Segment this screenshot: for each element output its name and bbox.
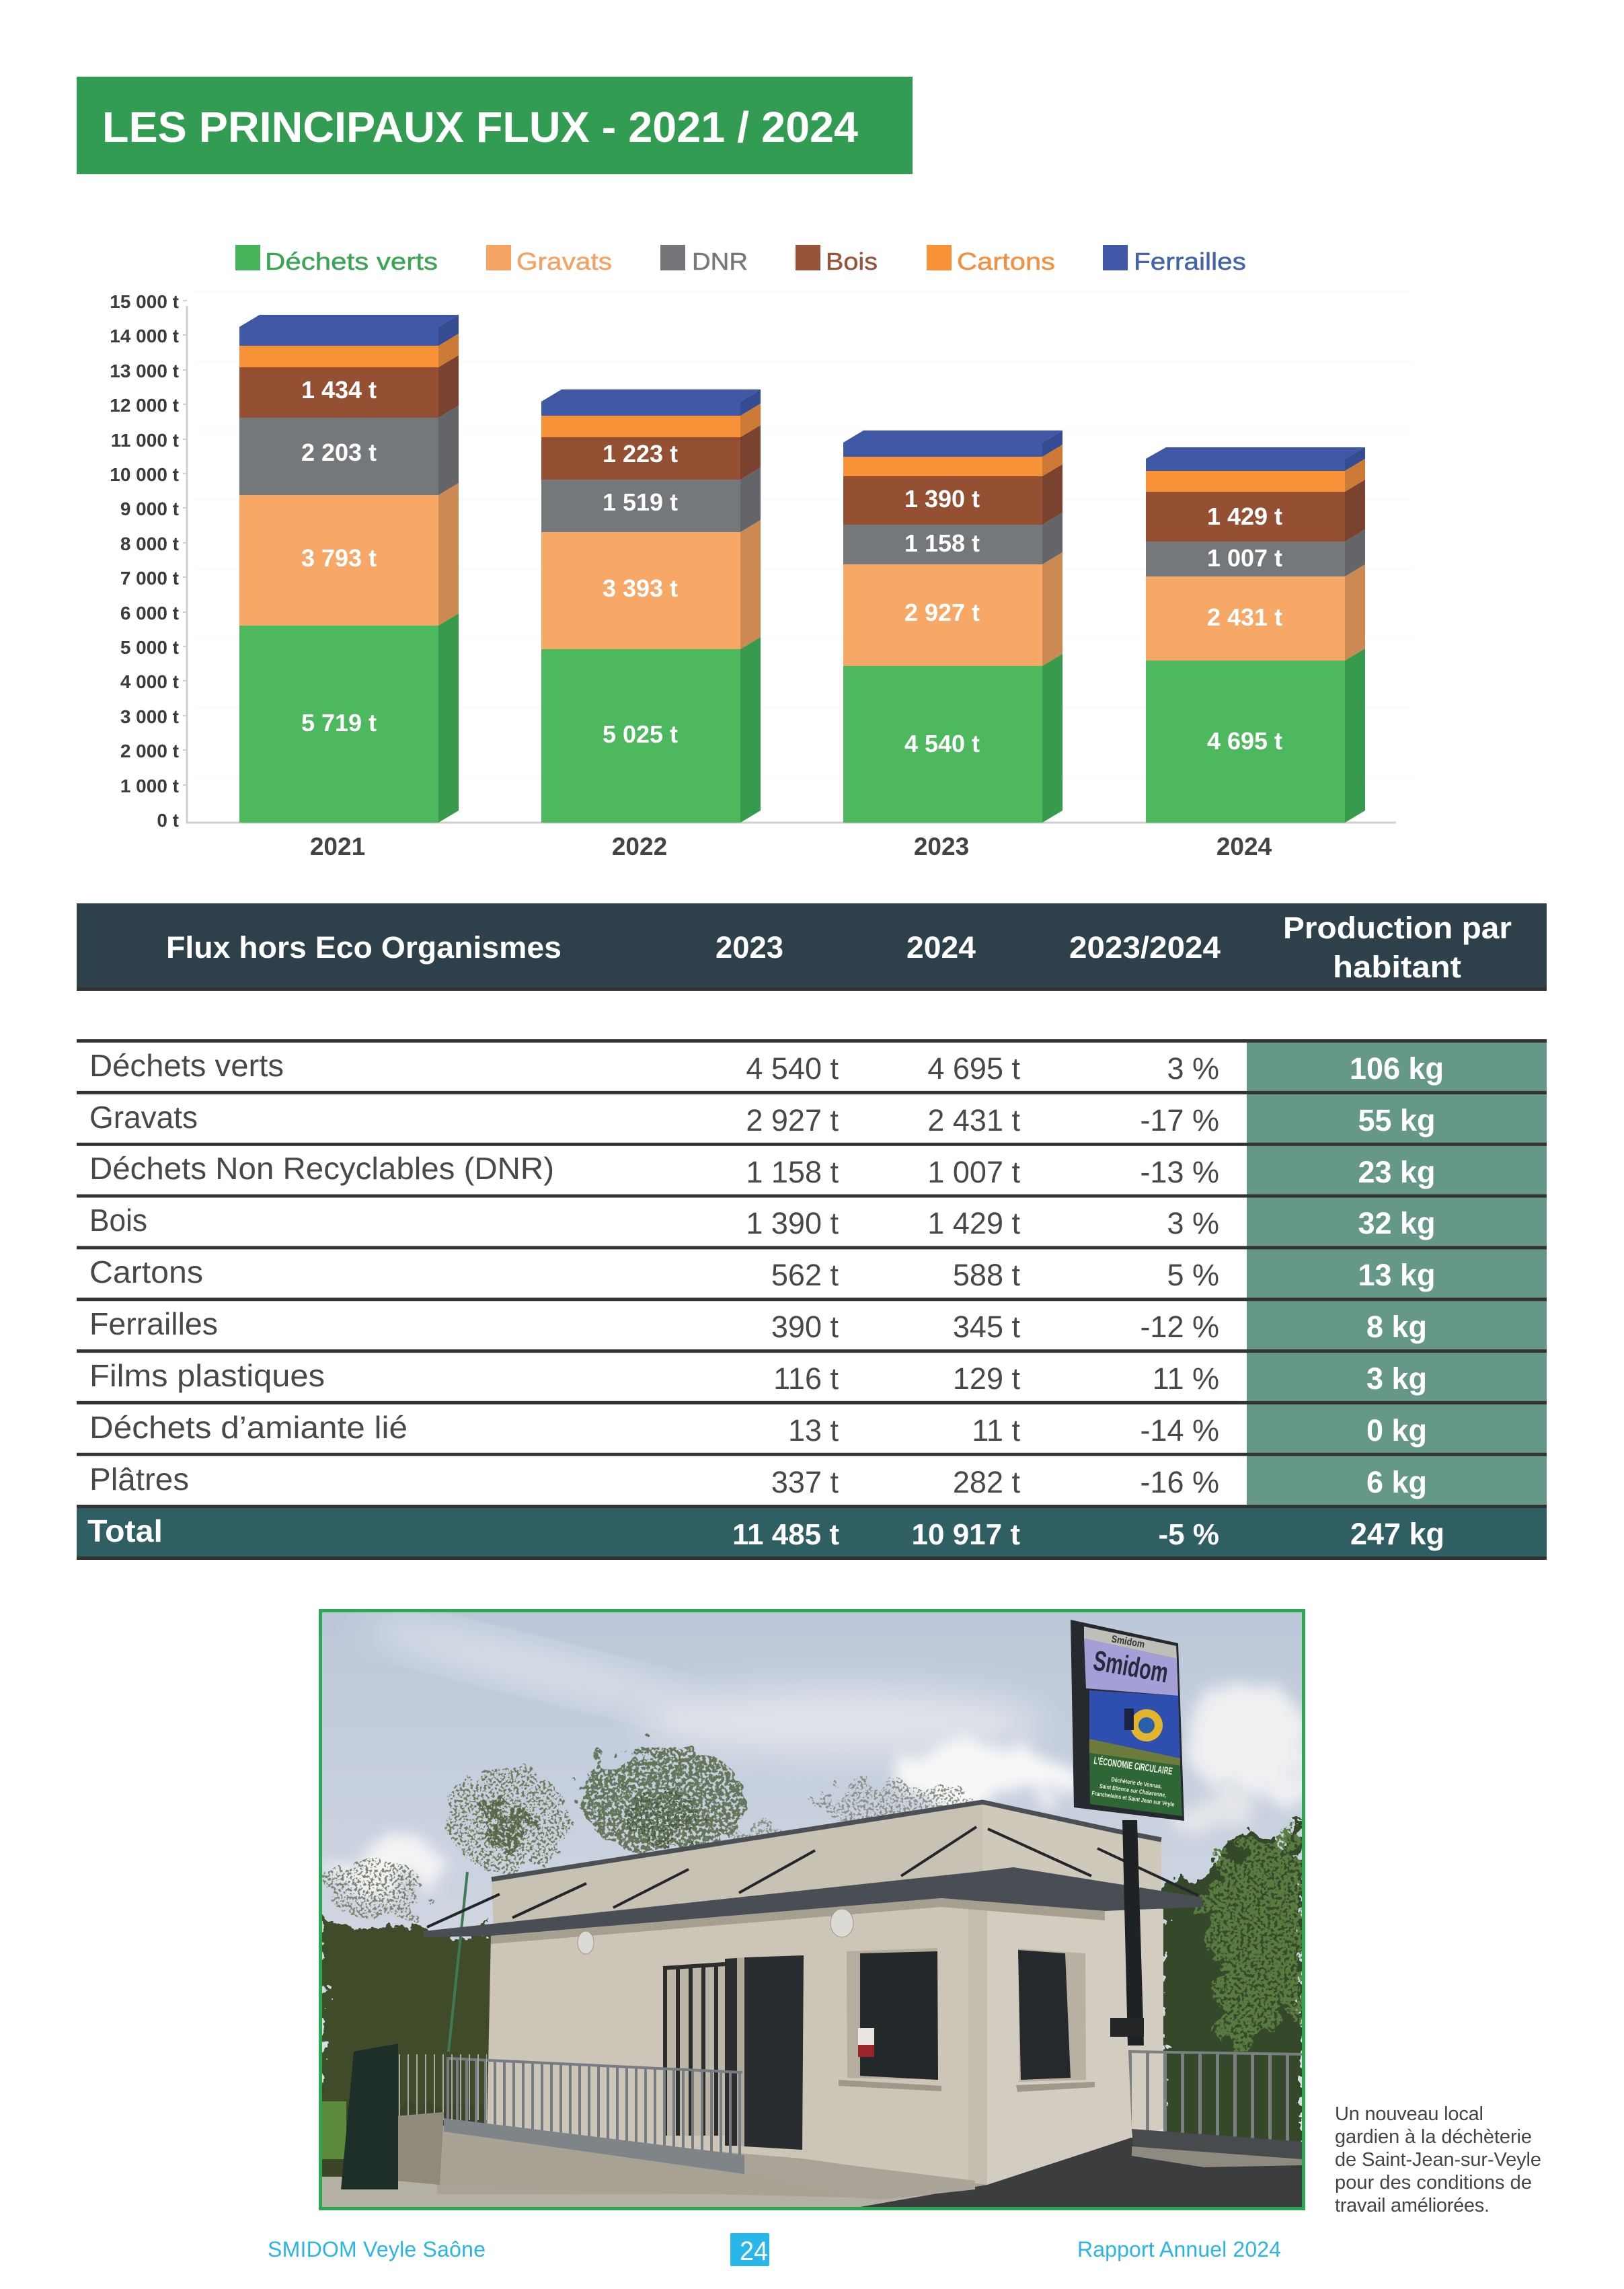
row: Films plastiques: 11 % (1153, 1361, 1219, 1396)
row: DNR: -13 % (1140, 1155, 1219, 1189)
y axis labels: 1 000 t (120, 776, 179, 796)
row: Déchets verts: 4 540 t (746, 1051, 839, 1086)
bar 2021: 2 203 t (301, 439, 377, 466)
row: Ferrailles: -12 % (1140, 1310, 1219, 1344)
bar 2021 (239, 315, 459, 823)
photo caption: de Saint-Jean-sur-Veyle (1335, 2149, 1541, 2171)
row: Gravats: 55 kg (1358, 1103, 1436, 1137)
bar 2021: 3 793 t (301, 544, 377, 572)
bar 2022: 5 025 t (603, 720, 678, 748)
background trees right (1161, 1816, 1302, 2166)
x axis year labels (310, 833, 1272, 860)
photo caption: pour des conditions de (1335, 2172, 1532, 2193)
row: Plâtres: 337 t (771, 1465, 839, 1499)
row: DNR: 1 158 t (746, 1155, 839, 1189)
bar 2021: 1 434 t (301, 376, 377, 404)
row: Bois: 1 429 t (927, 1206, 1020, 1240)
photo caption: Un nouveau local (1335, 2103, 1483, 2125)
billboard: Smidom (1110, 1633, 1145, 1651)
footer left: SMIDOM Veyle Saône (268, 2237, 486, 2261)
x axis year labels: 2022 (612, 833, 667, 860)
row: Total: 10 917 t (912, 1518, 1020, 1551)
row: Plâtres: 282 t (953, 1465, 1020, 1499)
bar 2022: 1 519 t (603, 488, 678, 516)
row: Plâtres: Plâtres (89, 1462, 189, 1497)
row: Plâtres (89, 1462, 1427, 1499)
table header: 2024 (906, 930, 976, 965)
y axis labels: 5 000 t (120, 637, 179, 658)
row: Déchets d'amiante lié (89, 1410, 1427, 1448)
y axis labels: 12 000 t (110, 395, 179, 416)
row: Déchets d'amiante lié: 11 t (972, 1413, 1020, 1448)
wall lamps (578, 1909, 853, 1954)
page number: 24 (740, 2237, 768, 2266)
row: Cartons: 5 % (1167, 1258, 1219, 1292)
footer right: Rapport Annuel 2024 (1077, 2237, 1281, 2261)
row: Bois (89, 1203, 1436, 1240)
photo caption: gardien à la déchèterie (1335, 2126, 1532, 2148)
bar 2022: 3 393 t (603, 574, 678, 602)
bar 2023: 2 927 t (904, 599, 980, 626)
billboard: Saint Etienne sur Chalaronne, (1099, 1783, 1167, 1799)
y axis labels: 14 000 t (110, 326, 179, 346)
table header: 2023 (716, 930, 783, 965)
y axis labels (110, 291, 179, 831)
row: Films plastiques: 116 t (773, 1361, 839, 1396)
billboard: L’ÉCONOMIE CIRCULAIRE (1093, 1755, 1173, 1777)
sky with clouds (322, 1609, 1315, 2207)
table header: Flux hors Eco Organismes (166, 930, 562, 965)
row: Films plastiques: 3 kg (1366, 1361, 1427, 1396)
chart legend: Bois (826, 248, 878, 275)
row: DNR (89, 1151, 1436, 1189)
row: Ferrailles: 345 t (953, 1310, 1020, 1344)
bar 2023: 1 158 t (904, 529, 980, 557)
chart legend: DNR (692, 248, 748, 275)
y axis labels: 8 000 t (120, 533, 179, 554)
bar 2022: 1 223 t (603, 440, 678, 467)
table header: habitant (1333, 950, 1461, 984)
row: Cartons: 13 kg (1358, 1258, 1436, 1292)
row: Déchets d'amiante lié: -14 % (1140, 1413, 1219, 1448)
y axis labels: 0 t (157, 810, 179, 831)
row: Déchets verts: 106 kg (1350, 1051, 1444, 1086)
barred window by door (663, 1964, 725, 2136)
x axis year labels: 2021 (310, 833, 365, 860)
title banner (77, 77, 913, 174)
row: Déchets d'amiante lié: Déchets d’amiante lié (89, 1410, 408, 1445)
billboard: Francheleins et Saint Jean sur Veyle (1091, 1790, 1175, 1808)
stacked bar chart (110, 245, 1412, 860)
gate and back railing (341, 2043, 487, 2189)
y axis labels: 11 000 t (111, 430, 179, 451)
billboard pole (1110, 1820, 1144, 2046)
y axis labels: 13 000 t (110, 361, 179, 381)
bar 2024 (1146, 447, 1365, 823)
row: Ferrailles (89, 1306, 1427, 1344)
billboard (1071, 1620, 1184, 1821)
chart legend: Ferrailles (1134, 248, 1246, 275)
bar 2024: 4 695 t (1207, 727, 1282, 755)
table header (77, 903, 1547, 991)
row: Déchets d'amiante lié: 0 kg (1366, 1413, 1427, 1448)
production per inhabitant column background (1247, 1039, 1547, 1505)
chart legend: Gravats (516, 248, 612, 275)
row: Plâtres: -16 % (1140, 1465, 1219, 1499)
row: Total: 11 485 t (732, 1518, 839, 1551)
y axis labels: 4 000 t (120, 671, 179, 692)
page number (730, 2233, 769, 2266)
bar 2022 (541, 389, 761, 823)
row: Déchets verts (89, 1048, 1444, 1086)
row: Bois: 3 % (1167, 1206, 1219, 1240)
row: DNR: 23 kg (1358, 1155, 1436, 1189)
photo caption (1335, 2103, 1541, 2216)
row: Total (77, 1508, 1547, 1560)
ground (322, 2126, 1302, 2207)
chart legend (235, 245, 1246, 275)
y axis labels: 6 000 t (120, 603, 179, 624)
row: Ferrailles: Ferrailles (89, 1306, 218, 1341)
canopy braces (427, 1827, 1198, 1927)
row: Cartons: 588 t (953, 1258, 1020, 1292)
bar 2024: 2 431 t (1207, 603, 1282, 631)
bar 2024: 1 429 t (1207, 502, 1282, 530)
row: DNR: 1 007 t (927, 1155, 1020, 1189)
row: Ferrailles: 8 kg (1366, 1310, 1427, 1344)
bar 2024: 1 007 t (1207, 544, 1282, 572)
bar 2021: 5 719 t (301, 709, 377, 737)
row: Films plastiques (89, 1358, 1427, 1396)
row: Total: 247 kg (1350, 1517, 1444, 1551)
y axis labels: 9 000 t (120, 498, 179, 519)
row: Cartons: Cartons (89, 1254, 203, 1289)
row: Gravats: Gravats (89, 1100, 198, 1135)
row: Bois: Bois (89, 1203, 147, 1238)
row: Bois: 1 390 t (746, 1206, 839, 1240)
row: Bois: 32 kg (1358, 1206, 1436, 1240)
row: Cartons: 562 t (771, 1258, 839, 1292)
billboard: Déchèterie de Vonnas, (1111, 1776, 1163, 1790)
photo caption: travail améliorées. (1335, 2195, 1490, 2216)
y axis labels: 3 000 t (120, 706, 179, 727)
row: Total: Total (87, 1513, 163, 1548)
y axis labels: 15 000 t (110, 291, 179, 312)
y axis labels: 10 000 t (110, 464, 179, 485)
table header: Production par (1283, 911, 1512, 945)
photo green frame (320, 1610, 1303, 2209)
row: Gravats: -17 % (1140, 1103, 1219, 1137)
window right (1016, 1949, 1095, 2092)
row: Gravats: 2 431 t (927, 1103, 1020, 1137)
bar 2023: 4 540 t (904, 730, 980, 757)
ramp and railing (438, 2058, 975, 2200)
row: Total: -5 % (1159, 1518, 1219, 1551)
row: DNR: Déchets Non Recyclables (DNR) (89, 1151, 554, 1186)
row: Déchets verts: 3 % (1167, 1051, 1219, 1086)
bar 2023 (843, 430, 1062, 823)
photo: guard building and billboard (320, 1609, 1315, 2209)
chart legend: Cartons (957, 248, 1055, 275)
x axis year labels: 2023 (914, 833, 969, 860)
row: Gravats: 2 927 t (746, 1103, 839, 1137)
green lamp post (449, 1872, 467, 2052)
row: Films plastiques: Films plastiques (89, 1358, 325, 1393)
row: Plâtres: 6 kg (1366, 1465, 1427, 1499)
right railing (1128, 2052, 1302, 2167)
row: Déchets d'amiante lié: 13 t (788, 1413, 839, 1448)
table header: 2023/2024 (1069, 930, 1221, 965)
data table (77, 1039, 1547, 1560)
window left (839, 1948, 941, 2091)
y axis labels: 2 000 t (120, 741, 179, 761)
y axis labels: 7 000 t (120, 568, 179, 589)
billboard: Smidom (1091, 1645, 1171, 1688)
row: Films plastiques: 129 t (953, 1361, 1020, 1396)
row: Gravats (89, 1100, 1436, 1137)
row: Cartons (89, 1254, 1436, 1292)
chart legend: Déchets verts (265, 248, 438, 275)
table row rules (77, 1041, 1547, 1507)
row: Déchets verts: 4 695 t (927, 1051, 1020, 1086)
chart gridlines and axes (183, 291, 1412, 823)
row: Ferrailles: 390 t (771, 1310, 839, 1344)
building walls (487, 1802, 1163, 2185)
canopy (424, 1867, 1202, 1944)
x axis year labels: 2024 (1216, 833, 1272, 860)
background trees left (322, 1746, 975, 2186)
bar 2023: 1 390 t (904, 485, 980, 513)
row: Déchets verts: Déchets verts (89, 1048, 284, 1083)
title banner: LES PRINCIPAUX FLUX - 2021 / 2024 (102, 103, 858, 151)
door (725, 1955, 804, 2150)
